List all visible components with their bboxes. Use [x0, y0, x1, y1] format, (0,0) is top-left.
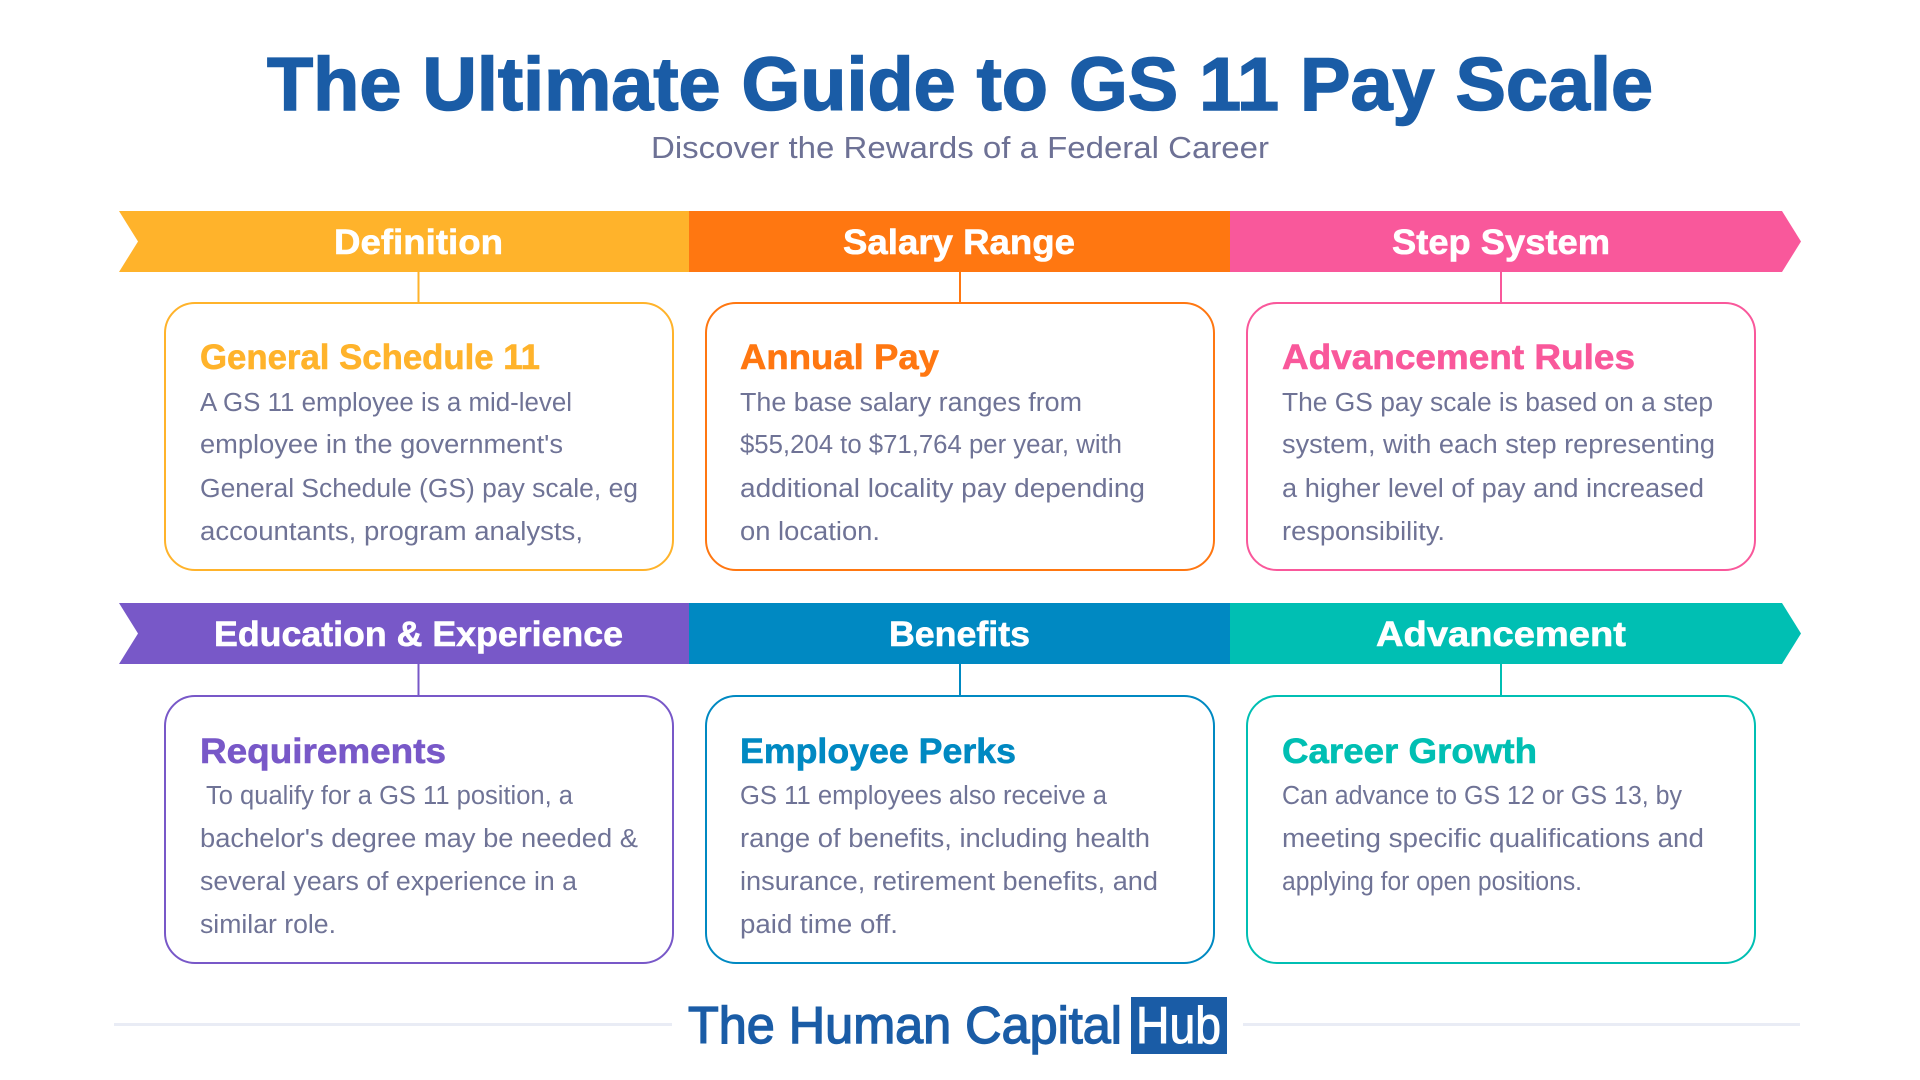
body text: The GS pay scale is based on a step: [1282, 389, 1713, 417]
footer logo: The Human Capital Hub: The Human Capital: [688, 997, 1122, 1055]
body text: [200, 782, 638, 939]
heading: Advancement Rules: [1282, 338, 1635, 377]
title: The Ultimate Guide to GS 11 Pay Scale: [267, 42, 1653, 126]
body text: Can advance to GS 12 or GS 13, by: [1282, 782, 1682, 810]
banner: Education & Experience: Education & Experience: [214, 615, 623, 654]
banner: Benefits: [689, 603, 1230, 664]
body text: To qualify for a GS 11 position, a: [206, 782, 574, 810]
panel: Career Growth: [1247, 664, 1755, 963]
banner: Advancement: Advancement: [1376, 615, 1626, 654]
body text: GS 11 employees also receive a: [740, 782, 1108, 810]
subtitle: Discover the Rewards of a Federal Career: [651, 130, 1269, 165]
panel: Employee Perks: [706, 664, 1214, 963]
body text: bachelor's degree may be needed &: [200, 825, 638, 853]
body text: employee in the government's: [200, 431, 563, 459]
body text: a higher level of pay and increased: [1282, 475, 1704, 503]
body text: meeting specific qualifications and: [1282, 825, 1704, 853]
banner row 2: [119, 603, 1801, 664]
banner row 1: [119, 211, 1801, 272]
footer logo: The Human Capital Hub: Hub: [1136, 997, 1221, 1055]
panel: Advancement Rules: [1247, 272, 1755, 570]
heading: Employee Perks: [740, 732, 1016, 771]
heading: Annual Pay: [740, 338, 940, 377]
heading: Requirements: [200, 732, 446, 771]
panel: Requirements: [165, 664, 673, 963]
body text: additional locality pay depending: [740, 475, 1145, 503]
body text: [1282, 389, 1715, 546]
banner: Step System: Step System: [1392, 223, 1610, 262]
body text: A GS 11 employee is a mid-level: [200, 389, 572, 417]
panel: General Schedule 11: [165, 272, 673, 570]
body text: The base salary ranges from: [740, 389, 1082, 417]
body text: several years of experience in a: [200, 868, 578, 896]
body text: range of benefits, including health: [740, 825, 1150, 853]
banner: Salary Range: Salary Range: [843, 223, 1075, 262]
banner: Definition: [119, 211, 689, 272]
body text: [740, 782, 1158, 939]
heading: General Schedule 11: [200, 338, 540, 377]
body text: similar role.: [200, 911, 336, 939]
panel: Annual Pay: [706, 272, 1214, 570]
banner: Education & Experience: [119, 603, 689, 664]
body text: paid time off.: [740, 911, 898, 939]
body text: on location.: [740, 518, 880, 546]
body text: accountants, program analysts,: [200, 518, 583, 546]
body text: [740, 389, 1145, 546]
banner: Step System: [1230, 211, 1801, 272]
body text: responsibility.: [1282, 518, 1445, 546]
body text: [200, 389, 638, 546]
banner: Benefits: Benefits: [889, 615, 1030, 654]
body text: $55,204 to $71,764 per year, with: [740, 431, 1122, 459]
body text: system, with each step representing: [1282, 431, 1715, 459]
body text: General Schedule (GS) pay scale, eg: [200, 475, 638, 503]
body text: [1282, 782, 1704, 896]
heading: Career Growth: [1282, 732, 1537, 771]
banner: Definition: Definition: [334, 223, 503, 262]
body text: insurance, retirement benefits, and: [740, 868, 1158, 896]
banner: Salary Range: [689, 211, 1230, 272]
body text: applying for open positions.: [1282, 868, 1582, 896]
banner: Advancement: [1230, 603, 1801, 664]
